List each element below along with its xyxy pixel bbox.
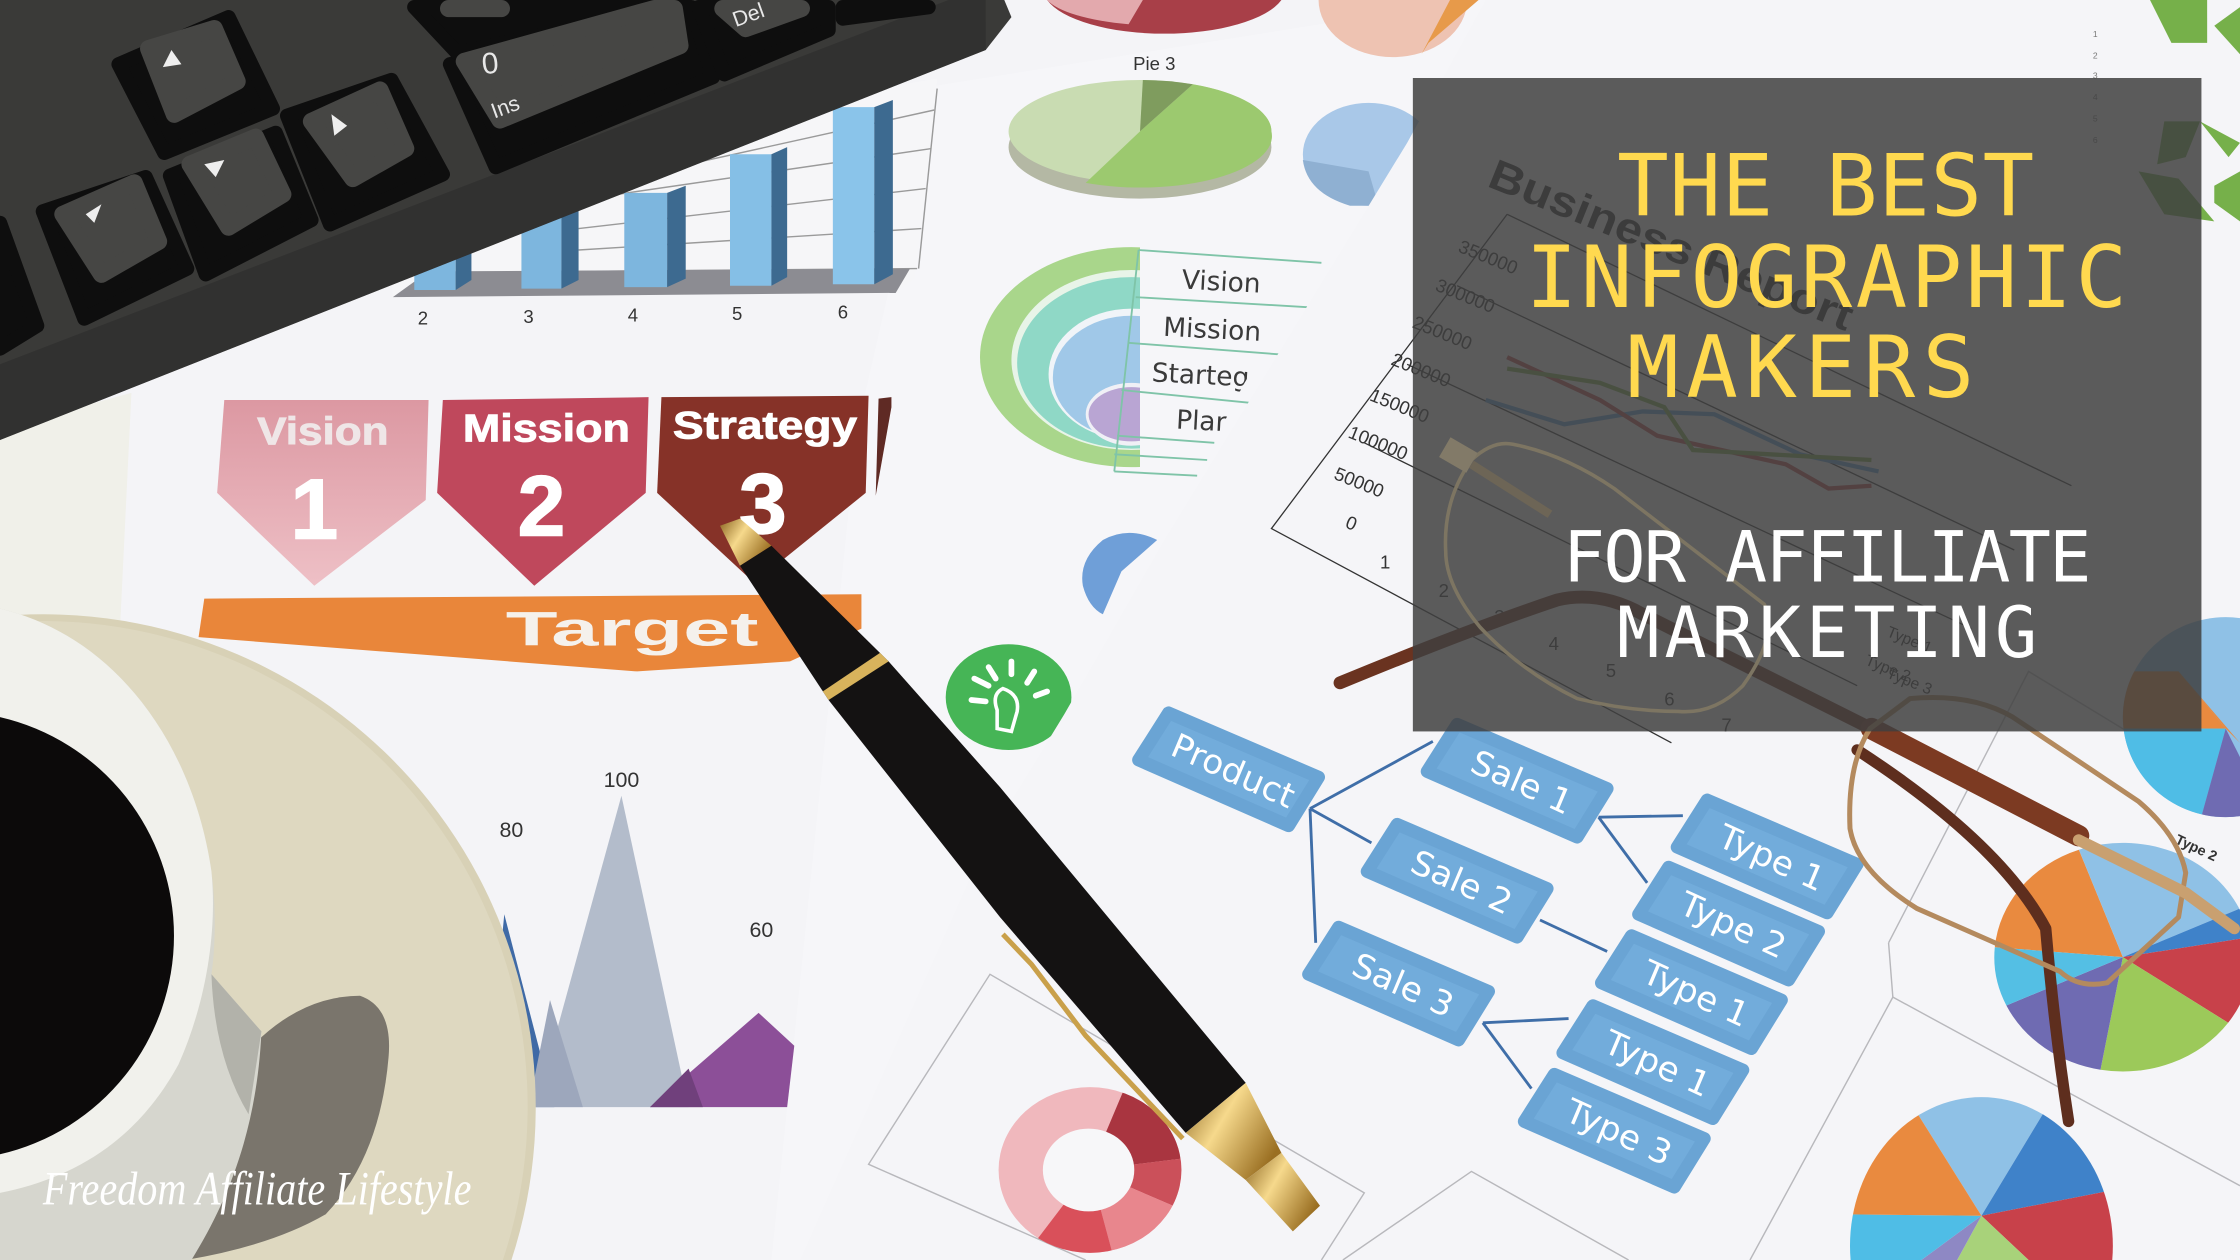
concentric arc chart with table: Starteg bbox=[1151, 357, 1250, 394]
node: Product bbox=[1139, 713, 1319, 826]
bar chart behind keyboard: 4 bbox=[628, 304, 638, 325]
title: the best infographic makers: MAKERS bbox=[1627, 318, 1974, 418]
business report sheet under overlay: Type 2 bbox=[1863, 652, 1913, 686]
keyboard bbox=[0, 0, 1011, 440]
bar chart behind keyboard bbox=[386, 79, 937, 328]
target band: Target bbox=[506, 603, 759, 657]
shield: Mission 2 bbox=[437, 397, 649, 586]
subtitle: for affiliate marketing: MARKETING bbox=[1617, 592, 2037, 674]
node: Type 1 bbox=[1677, 800, 1857, 913]
donut chart bbox=[998, 1087, 1182, 1253]
subtitle: for affiliate marketing: FOR AFFILIATE bbox=[1563, 516, 2091, 598]
node: Type 1 bbox=[1563, 1006, 1743, 1119]
node: Type 2 bbox=[1639, 867, 1819, 980]
business report sheet under overlay: 5 bbox=[1606, 660, 1616, 681]
pointer chart: triangles with values: 100 bbox=[604, 768, 639, 792]
brand signature: Freedom Affiliate Lifestyle bbox=[42, 1163, 471, 1215]
node: Sale 3: Sale 3 bbox=[1346, 945, 1459, 1026]
coffee cup bbox=[0, 609, 261, 1260]
pointer chart: triangles with values bbox=[486, 768, 794, 1107]
business report sheet under overlay: 2 bbox=[1439, 580, 1449, 601]
business report sheet under overlay: 200000 bbox=[1389, 349, 1454, 391]
node: Sale 3 bbox=[1309, 927, 1489, 1040]
legend: small colour keys: 3 bbox=[2093, 71, 2098, 81]
target band bbox=[199, 594, 861, 671]
shield: Strategy 3: 3 bbox=[739, 456, 787, 552]
shield: Vision 1: Vision bbox=[257, 410, 389, 453]
title: the best infographic makers: INFOGRAPHIC bbox=[1526, 228, 2127, 328]
business report sheet under overlay: 50000 bbox=[1331, 463, 1387, 502]
legend: small colour keys: 1 bbox=[2093, 29, 2098, 39]
concentric arc chart with table: Mission bbox=[1162, 312, 1262, 348]
chart frames bbox=[869, 671, 2240, 1260]
node: Sale 1: Sale 1 bbox=[1465, 743, 1578, 823]
key labels: Ins bbox=[488, 91, 523, 123]
key caps bbox=[63, 9, 801, 274]
shield: Strategy 3: Strategy bbox=[673, 405, 858, 448]
node: Sale 1 bbox=[1427, 724, 1607, 837]
icon: green recycling arrows bbox=[2139, 0, 2240, 221]
small blue pie bbox=[1082, 533, 1157, 614]
bar chart behind keyboard: 2 bbox=[418, 307, 428, 328]
pie chart: Pie 3 bbox=[1009, 53, 1272, 199]
business report sheet under overlay: Business Report bbox=[1482, 150, 1860, 341]
spoon bbox=[86, 996, 389, 1260]
eyeglasses: left lens seen through panel bbox=[1439, 437, 1768, 712]
key arrow glyphs bbox=[86, 50, 347, 223]
pie chart: top right bbox=[2122, 617, 2240, 818]
blue pie chart bbox=[1303, 103, 1434, 206]
dark overlay panel bbox=[1413, 78, 2201, 731]
pie chart: Pie 3: Pie 3 bbox=[1133, 53, 1175, 74]
legend: small colour keys bbox=[2093, 29, 2098, 145]
title: the best infographic makers bbox=[1526, 137, 2127, 418]
business report sheet under overlay: 250000 bbox=[1410, 311, 1475, 354]
legend: small colour keys: 5 bbox=[2093, 113, 2098, 123]
saucer bbox=[0, 614, 536, 1260]
node: Type 2: Type 2 bbox=[1673, 884, 1792, 967]
flow chart: product tree bbox=[1139, 713, 1857, 1187]
node: Type 3: Type 3 bbox=[1559, 1091, 1677, 1174]
business report sheet under overlay: 6 bbox=[1664, 689, 1675, 710]
arrow and numpad key wells bbox=[0, 7, 929, 349]
pointer chart: triangles with values: 60 bbox=[750, 918, 773, 942]
shield: Strategy 3 bbox=[657, 396, 869, 583]
business report sheet under overlay: 7 bbox=[1721, 714, 1732, 735]
bar chart behind keyboard: 3 bbox=[523, 306, 534, 327]
node: Type 1: Type 1 bbox=[1597, 1022, 1716, 1106]
key labels bbox=[480, 0, 768, 123]
node: Type 1 bbox=[1601, 936, 1781, 1049]
concentric arc chart with table: Vision bbox=[1181, 265, 1261, 300]
business report sheet under overlay: 100000 bbox=[1346, 421, 1411, 464]
bar chart behind keyboard: 6 bbox=[838, 302, 848, 323]
shield: cropped fourth bbox=[876, 397, 891, 496]
concentric arc chart with table bbox=[980, 247, 1321, 476]
business report sheet under overlay: 3 bbox=[1494, 606, 1505, 627]
legend: small colour keys: 2 bbox=[2093, 51, 2098, 61]
business report sheet under overlay: 4 bbox=[1549, 633, 1559, 654]
business report sheet under overlay: 350000 bbox=[1456, 236, 1521, 278]
subtitle: for affiliate marketing bbox=[1563, 516, 2091, 674]
pie chart: bottom bbox=[1850, 1097, 2113, 1260]
pointer chart: triangles with values: 80 bbox=[500, 818, 523, 842]
node: Product: Product bbox=[1165, 726, 1300, 817]
business report sheet under overlay: Type 1 bbox=[1884, 624, 1934, 657]
legend: small colour keys: 4 bbox=[2093, 92, 2098, 102]
connector lines bbox=[1310, 741, 1683, 1089]
pen bbox=[720, 519, 1320, 1231]
business report sheet under overlay: 1 bbox=[1380, 552, 1390, 573]
sheet: organisation chart paper bbox=[800, 0, 2240, 1260]
pie chart: right bbox=[1994, 843, 2240, 1071]
node: Type 1: Type 1 bbox=[1636, 952, 1755, 1036]
legend: small colour keys: 6 bbox=[2093, 135, 2098, 145]
business report sheet under overlay: 0 bbox=[1343, 511, 1360, 535]
business report sheet under overlay: 300000 bbox=[1433, 274, 1498, 317]
bar chart behind keyboard: 5 bbox=[732, 303, 742, 324]
business report sheet under overlay bbox=[1271, 150, 2071, 743]
shield: Mission 2: 2 bbox=[518, 459, 565, 555]
eyeglasses: temples and right lens bbox=[1340, 597, 2234, 1121]
shield: Vision 1 bbox=[217, 400, 429, 586]
label: Type 2: Type 2 bbox=[2173, 832, 2219, 865]
key labels: 0 bbox=[480, 47, 500, 81]
node: Sale 2: Sale 2 bbox=[1405, 843, 1518, 923]
top cropped pie charts bbox=[1047, 0, 1946, 79]
node: Type 1: Type 1 bbox=[1712, 817, 1830, 900]
node: Sale 2 bbox=[1367, 824, 1547, 937]
icon: green light bulb badge bbox=[946, 644, 1071, 750]
shield: Mission 2: Mission bbox=[463, 407, 630, 450]
business report sheet under overlay: 150000 bbox=[1367, 384, 1432, 427]
shield: Vision 1: 1 bbox=[290, 462, 338, 558]
business report sheet under overlay: Type 3 bbox=[1884, 665, 1935, 699]
node: Type 3 bbox=[1524, 1074, 1704, 1187]
title: the best infographic makers: THE BEST bbox=[1617, 137, 2034, 237]
concentric arc chart with table: Plan bbox=[1175, 405, 1233, 439]
